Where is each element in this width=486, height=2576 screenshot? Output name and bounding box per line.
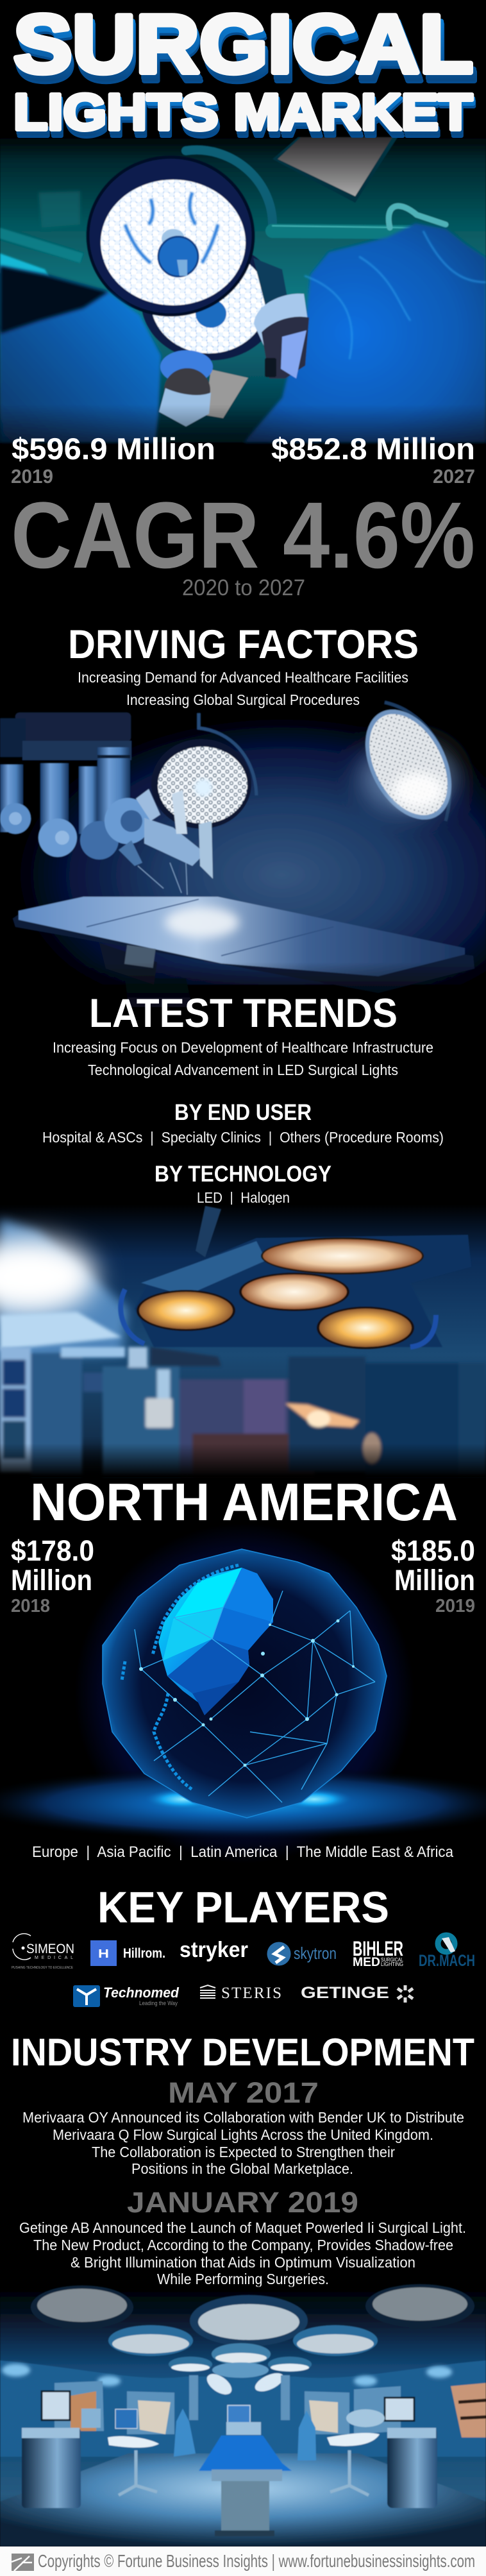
logo: Skytron — [267, 1942, 337, 1965]
lamp two — [141, 242, 292, 360]
network lines — [135, 1582, 375, 1802]
coastlines — [122, 1565, 239, 1790]
footer bar — [0, 2546, 486, 2576]
logo: Technomed — [73, 1985, 180, 2007]
robotic arms — [0, 713, 213, 895]
end user segments: Hospital & ASCs | Specialty Clinics | Others (Procedure Rooms) — [42, 1129, 444, 1146]
logo: Skytron: skytron — [294, 1944, 337, 1963]
development text 2019: While Performing Surgeries. — [157, 2271, 329, 2287]
date: January 2019: JANUARY 2019 — [127, 2186, 358, 2219]
logo: Bihler Med — [353, 1937, 403, 1969]
machine left — [22, 2391, 137, 2508]
right surgeon gown — [244, 223, 486, 443]
logo: Simeon Medical: PUSHING TECHNOLOGY TO EXCELLENCE — [12, 1966, 73, 1970]
logo: Simeon Medical: MEDICAL — [35, 1956, 73, 1960]
development text 2019: & Bright Illumination that Aids in Optimum Visualization — [71, 2254, 415, 2271]
heading: latest trends: LATEST TRENDS — [89, 991, 398, 1036]
floor glow — [0, 1767, 486, 1841]
operating table — [13, 897, 474, 1007]
globe — [103, 1549, 387, 1818]
logo: Bihler Med: MED — [353, 1956, 380, 1969]
development text 2017: Positions in the Global Marketplace. — [131, 2160, 353, 2177]
year 2027: 2027 — [433, 465, 475, 487]
nurse — [159, 350, 213, 427]
globe backdrop — [74, 1523, 414, 1863]
operating room photo with halogen lamps — [0, 1205, 486, 1477]
hero photo: surgical lights and surgeons — [0, 135, 486, 478]
driving factor list: Increasing Demand for Advanced Healthcare Facilities — [78, 669, 408, 686]
central table — [199, 2405, 292, 2536]
market size stats — [11, 432, 475, 600]
logo: Bihler Med: BIHLER — [353, 1937, 403, 1960]
logo: Stryker: stryker — [180, 1938, 248, 1962]
heading: by end user: BY END USER — [174, 1100, 312, 1125]
other regions: Europe | Asia Pacific | Latin America | The Middle East & Africa — [32, 1843, 454, 1861]
date: May 2017: MAY 2017 — [168, 2076, 319, 2109]
floor — [0, 2453, 486, 2546]
development text 2017: The Collaboration is Expected to Strengthen their — [92, 2144, 395, 2160]
development text 2017: Merivaara OY Announced its Collaboration with Bender UK to Distribute — [22, 2109, 464, 2126]
logo: Technomed: Technomed — [103, 1985, 180, 2001]
title line: Lights Market: LIGHTS MARKET — [15, 90, 474, 147]
value 2027: $852.8 Million — [271, 432, 475, 466]
staff right — [297, 2411, 316, 2461]
machine right — [346, 2398, 437, 2508]
region values: 2019: 2019 — [435, 1596, 475, 1616]
network nodes — [139, 1619, 355, 1767]
left lamp — [137, 1290, 235, 1331]
region values: 2018: 2018 — [11, 1596, 50, 1616]
logo: Bihler Med: SURGICAL — [381, 1957, 403, 1963]
lamp arm — [186, 150, 446, 232]
large lamp — [261, 1237, 424, 1275]
heading: north america: NORTH AMERICA — [30, 1472, 458, 1532]
logo: Hillrom: H — [98, 1947, 109, 1960]
operating theatre photo — [0, 2284, 486, 2546]
surgeon head — [254, 294, 309, 378]
logo: Hillrom: Hillrom. — [123, 1946, 165, 1961]
logo: Bihler Med: LIGHTING — [381, 1962, 403, 1967]
logo: Getinge: GETINGE — [301, 1984, 389, 2002]
left figure gown — [0, 266, 161, 443]
region values: 2019: $185.0 — [391, 1534, 475, 1567]
development text 2017: Merivaara Q Flow Surgical Lights Across the United Kingdom. — [53, 2126, 433, 2143]
development text 2019: The New Product, According to the Company, Provides Shadow-free — [33, 2237, 453, 2253]
footer logo — [12, 2554, 34, 2571]
driving factor list — [78, 669, 408, 708]
heading: key players: KEY PLAYERS — [97, 1883, 389, 1932]
logo: Technomed: Leading the Way — [139, 2000, 178, 2006]
logo: Dr. Mach — [419, 1935, 475, 1970]
heading: by technology: BY TECHNOLOGY — [155, 1162, 331, 1187]
title line: Surgical: SURGICAL — [16, 6, 477, 99]
region values: 2018 — [11, 1534, 94, 1616]
land mass — [158, 1568, 273, 1715]
ceiling panel — [272, 137, 398, 203]
title line: Lights Market: LIGHTS MARKET — [15, 87, 474, 144]
region values: 2019: Million — [394, 1564, 475, 1597]
development text 2019 — [19, 2219, 466, 2287]
left window glow — [0, 1219, 128, 1360]
room back wall — [0, 1347, 486, 1475]
region values: 2018: Million — [11, 1564, 92, 1597]
trends list: Increasing Focus on Development of Healthcare Infrastructure — [53, 1039, 433, 1056]
trends list: Technological Advancement in LED Surgical Lights — [88, 1062, 398, 1078]
year 2019: 2019 — [11, 465, 53, 487]
windows — [54, 2381, 486, 2437]
logo: Hillrom — [90, 1940, 165, 1966]
left lamp — [151, 713, 256, 829]
staff — [174, 2409, 196, 2457]
company logos — [12, 1934, 475, 2007]
technology segments: LED | Halogen — [197, 1189, 290, 1206]
ceiling lights — [31, 2284, 474, 2398]
region values: 2018: $178.0 — [11, 1534, 94, 1567]
logo: Getinge — [301, 1984, 413, 2003]
title line: Lights Market: LIGHTS MARKET — [13, 83, 473, 140]
right lamp — [348, 695, 469, 834]
middle lamp — [239, 1273, 349, 1311]
region values: 2019 — [391, 1534, 475, 1616]
driving factors image: robotic arms and lamps — [0, 695, 486, 1007]
logo: Simeon Medical: SIMEON — [26, 1942, 74, 1956]
title line: Surgical: SURGICAL — [15, 4, 476, 96]
second ceiling panel — [205, 369, 248, 418]
lamp assembly — [121, 1206, 471, 1349]
development text 2019: Getinge AB Announced the Launch of Maquet Powerled Ii Surgical Light. — [19, 2219, 466, 2236]
lamp one — [88, 157, 253, 315]
title — [13, 0, 477, 147]
wall band — [0, 2360, 486, 2457]
logo: Simeon Medical — [12, 1934, 74, 1970]
chairs — [108, 2433, 380, 2495]
logo: Steris: STERIS — [221, 1985, 281, 2002]
columns — [189, 2375, 198, 2420]
value 2019: $596.9 Million — [12, 432, 215, 466]
right lamp — [317, 1307, 414, 1349]
CAGR period: 2020 to 2027 — [182, 575, 305, 600]
driving factor list: Increasing Global Surgical Procedures — [126, 691, 360, 708]
development text 2017 — [22, 2109, 464, 2177]
trends list — [53, 1039, 433, 1078]
heading: driving factors: DRIVING FACTORS — [68, 622, 419, 667]
title line: Surgical: SURGICAL — [13, 0, 473, 90]
